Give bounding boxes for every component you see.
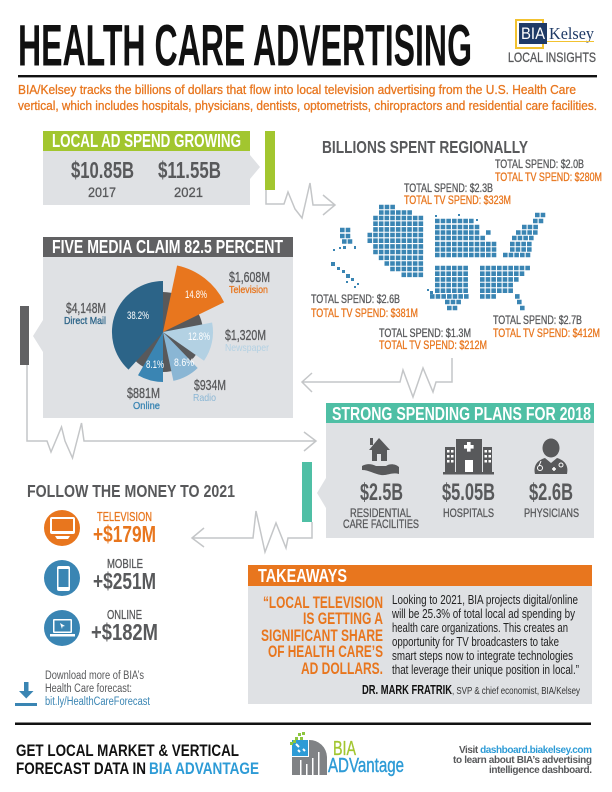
region label: northeast xyxy=(495,159,602,184)
forecast item: online xyxy=(44,608,158,646)
forecast item: online: ONLINE xyxy=(107,608,142,622)
heading: billions spent regionally: BILLIONS SPENT REGIONALLY xyxy=(322,137,528,157)
region label: southwest xyxy=(379,328,487,352)
logo: BIA ADVantage xyxy=(290,732,404,777)
icon: house in hand xyxy=(362,438,399,475)
forecast item: online: +$182M xyxy=(91,619,158,645)
forecast item: mobile xyxy=(44,557,156,596)
pie chart: 12.8% xyxy=(188,331,210,343)
pie labels: Television xyxy=(229,284,268,296)
logo: BIA Kelsey Local Insights xyxy=(508,20,596,65)
pie labels: $934M xyxy=(194,377,226,394)
arrow: media to spending plans xyxy=(27,365,316,458)
logo: BIA Kelsey Local Insights: Kelsey xyxy=(549,24,594,43)
region label: southeast: TOTAL SPEND: $2.7B xyxy=(493,315,582,327)
footer headline: FORECAST DATA IN xyxy=(16,759,146,778)
arrow: spend to regional map xyxy=(266,183,335,218)
footer call to action: to learn about BIA’s advertising xyxy=(453,755,592,766)
pie chart xyxy=(112,266,224,382)
stat: physicians: $2.6B xyxy=(529,479,573,506)
forecast item: television xyxy=(44,510,156,547)
panel: local ad spend growing: $10.85B xyxy=(71,157,134,183)
quote body xyxy=(391,593,579,677)
pull quote: SIGNIFICANT SHARE xyxy=(261,626,383,645)
panel: five media claim 82.5 percent: FIVE MEDIA CLAIM 82.5 PERCENT xyxy=(52,237,283,257)
footer headline: GET LOCAL MARKET & VERTICAL xyxy=(16,741,239,760)
pie labels: Online xyxy=(133,400,160,412)
forecast item: mobile: +$251M xyxy=(93,568,156,594)
icon: download xyxy=(15,682,37,706)
arrow: map to strong spending / media xyxy=(302,358,452,397)
attribution: , SVP & chief economist, BIA/Kelsey xyxy=(452,686,580,697)
pie chart: 14.8% xyxy=(185,289,207,301)
stat: physicians: PHYSICIANS xyxy=(524,506,579,520)
footer headline xyxy=(16,741,259,778)
region label: northeast: TOTAL SPEND: $2.0B xyxy=(495,159,584,171)
pie labels: Radio xyxy=(193,392,216,404)
forecast item: mobile: MOBILE xyxy=(107,557,143,571)
arrow: spending plans to follow the money xyxy=(192,511,312,552)
region label: midwest xyxy=(404,183,511,207)
logo: BIA ADVantage: ADVantage xyxy=(328,755,404,777)
pie labels: $1,608M xyxy=(229,269,270,286)
footer headline: BIA ADVANTAGE xyxy=(149,759,259,778)
region label: southeast xyxy=(493,315,600,340)
footer call to action: intelligence dashboard. xyxy=(489,765,592,776)
pie labels: $4,148M xyxy=(66,300,106,317)
logo: BIA Kelsey Local Insights: BIA xyxy=(521,24,546,43)
stat: residential care facilities: CARE FACILITIES xyxy=(343,517,419,531)
icon: physician xyxy=(535,438,567,474)
heading: follow the money: FOLLOW THE MONEY TO 2021 xyxy=(27,481,235,501)
pie chart: 8.6% xyxy=(174,357,194,369)
icon: hospital xyxy=(443,439,494,474)
region label: midwest: TOTAL TV SPEND: $323M xyxy=(404,195,511,207)
pull quote: “LOCAL TELEVISION xyxy=(263,593,383,612)
stat: residential care facilities xyxy=(343,479,419,531)
download text: bit.ly/HealthCareForecast xyxy=(45,696,151,708)
region label: southwest: TOTAL TV SPEND: $212M xyxy=(379,340,487,352)
stat: physicians xyxy=(524,479,579,520)
pull quote: AD DOLLARS. xyxy=(301,659,383,678)
panel: local ad spend growing: 2017 xyxy=(88,184,116,200)
footer call to action: Visit dashboard.biakelsey.com xyxy=(459,745,592,756)
panel: takeaways: TAKEAWAYS xyxy=(258,566,347,586)
stat: hospitals: HOSPITALS xyxy=(443,506,494,520)
pull quote: IS GETTING A xyxy=(303,609,383,628)
panel: local ad spend growing: $11.55B xyxy=(158,157,221,183)
forecast item: television: TELEVISION xyxy=(97,510,152,524)
stat: residential care facilities: $2.5B xyxy=(360,479,403,506)
panel: local ad spend growing: LOCAL AD SPEND GROWING xyxy=(52,131,241,151)
pull quote xyxy=(261,593,383,678)
pie labels xyxy=(64,269,270,412)
pie chart: 8.1% xyxy=(146,359,164,371)
region label: midwest: TOTAL SPEND: $2.3B xyxy=(404,183,493,195)
panel: takeaways xyxy=(248,565,592,704)
region label: west: TOTAL SPEND: $2.6B xyxy=(311,294,400,306)
pie labels: $881M xyxy=(127,385,160,402)
region label: west: TOTAL TV SPEND: $381M xyxy=(311,308,418,320)
stat: residential care facilities: RESIDENTIAL xyxy=(350,506,411,520)
quote body: opportunity for TV broadcasters to take xyxy=(392,635,559,649)
download text: Health Care forecast: xyxy=(45,683,132,695)
intro text: BIA/Kelsey tracks the billions of dollars that flow into local television advertising from the U.S. Health Care xyxy=(18,82,576,97)
pie labels: Newspaper xyxy=(225,342,269,354)
pie labels: $1,320M xyxy=(225,327,266,344)
footer call to action xyxy=(453,745,592,776)
stat: hospitals: $5.05B xyxy=(442,479,495,506)
panel: five media claim 82.5 percent xyxy=(33,237,293,418)
intro text xyxy=(18,82,597,113)
panel: local ad spend growing: 2021 xyxy=(174,184,203,200)
dotted US map xyxy=(331,207,545,308)
stat: hospitals xyxy=(442,479,495,520)
pull quote: OF HEALTH CARE’S xyxy=(268,642,383,661)
download text: Download more of BIA’s xyxy=(45,670,144,682)
pie labels: Direct Mail xyxy=(64,315,106,327)
download text xyxy=(45,670,151,708)
attribution: DR. MARK FRATRIK xyxy=(362,683,452,697)
pie chart: 38.2% xyxy=(127,310,149,322)
logo: BIA ADVantage: BIA xyxy=(333,738,356,760)
attribution xyxy=(362,683,580,697)
panel: strong spending plans for 2018 xyxy=(317,403,594,538)
forecast item: television: +$179M xyxy=(93,521,156,547)
panel: local ad spend growing xyxy=(43,131,260,205)
region label: southwest: TOTAL SPEND: $1.3M xyxy=(379,328,471,340)
region label: west xyxy=(311,294,418,320)
